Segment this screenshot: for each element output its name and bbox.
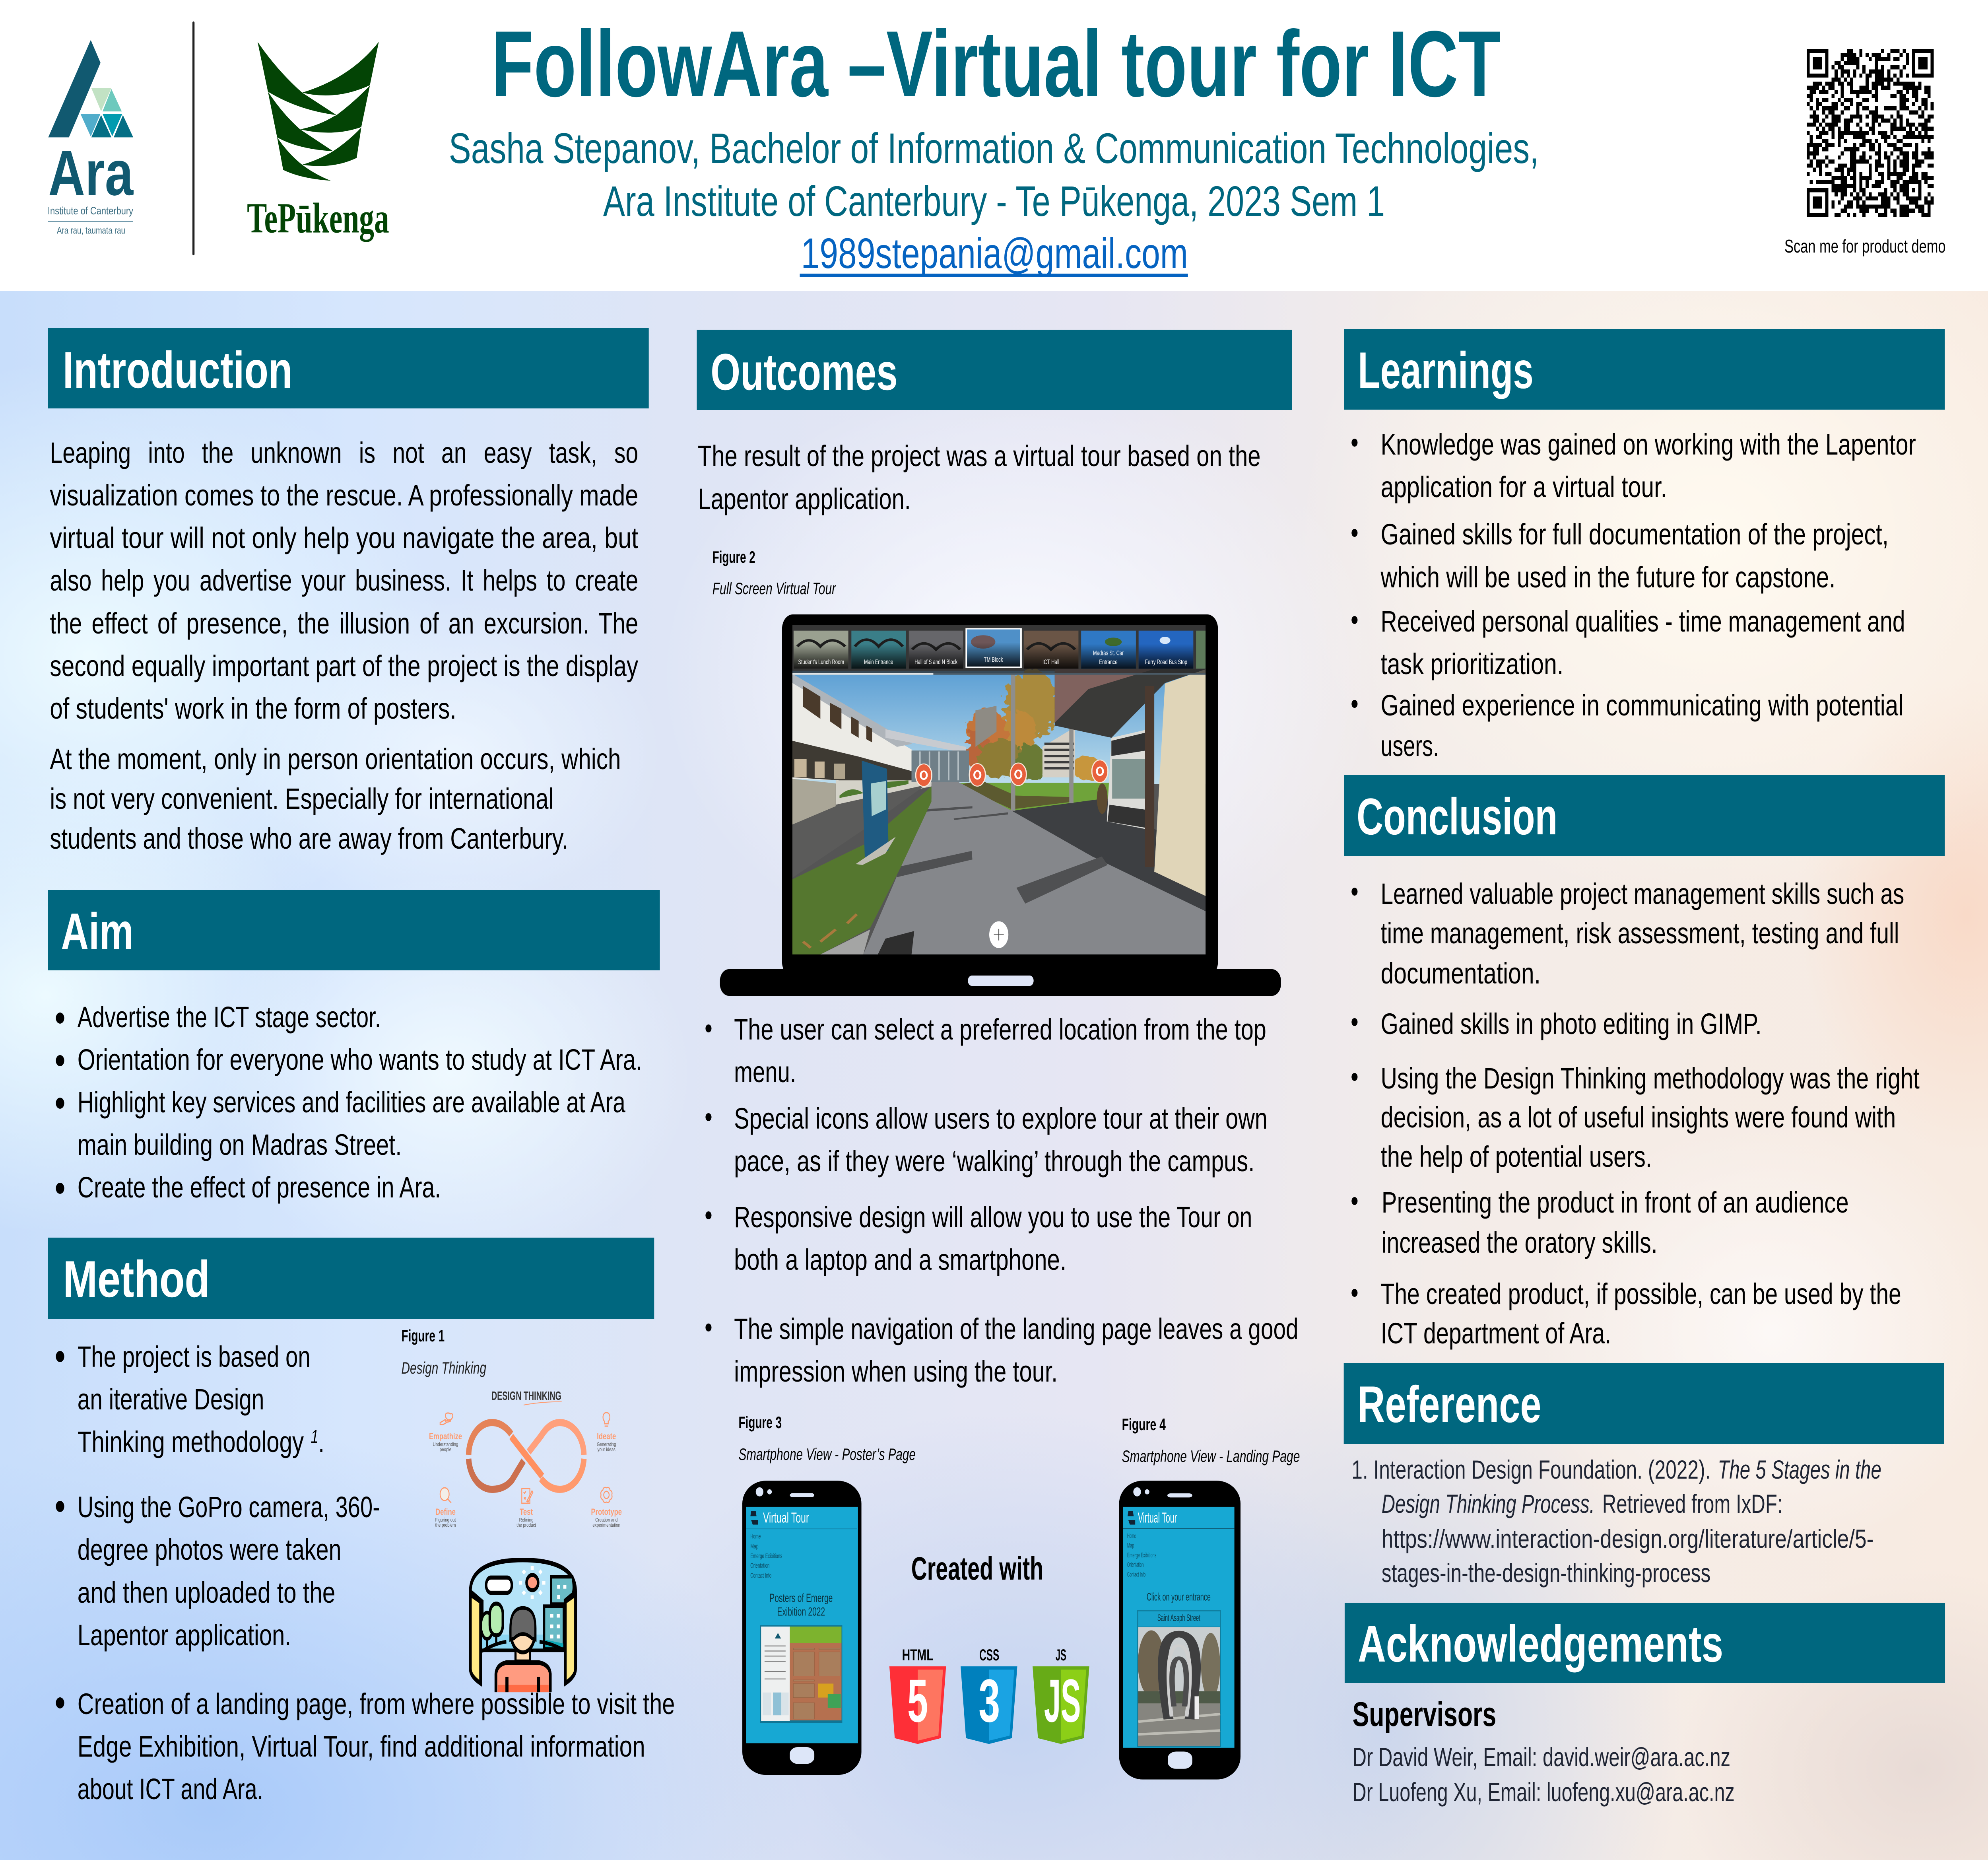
figure 4 caption: Figure 4	[1122, 1415, 1166, 1434]
figure 4 caption	[1122, 1415, 1300, 1465]
stage: prototype: Prototype	[591, 1507, 622, 1517]
smartphone: landing page: Click on your entrance	[1147, 1590, 1211, 1603]
stage: test	[516, 1489, 536, 1528]
QR code	[1807, 49, 1934, 217]
list: outcomes bullets	[705, 1013, 1299, 1388]
poster preview	[760, 1625, 842, 1723]
text block: citation: stages-in-the-design-thinking-process	[1382, 1559, 1710, 1588]
smartphone: posters page: Exibition 2022	[777, 1605, 825, 1618]
list: outcomes bullets: pace, as if they were ‘walking’ through the campus.	[734, 1145, 1254, 1178]
list: aim bullets	[56, 1001, 642, 1204]
figure 1: design thinking: Figure 1	[402, 1326, 445, 1345]
panel: learnings	[1344, 329, 1945, 762]
supervisors contacts: Dr Luofeng Xu, Email: luofeng.xu@ara.ac.nz	[1353, 1778, 1735, 1807]
text block: introduction body: is not very convenient. Especially for international	[50, 782, 553, 815]
figure 1: design thinking	[402, 1326, 622, 1528]
smartphone: posters page	[742, 1481, 862, 1775]
location thumbnails: Main Entrance	[864, 659, 893, 666]
smartphone: landing page: Contact Info	[1127, 1571, 1145, 1578]
heading: Reference: Reference	[1357, 1376, 1541, 1433]
logo divider	[192, 21, 194, 255]
list: outcomes bullets: The user can select a preferred location from the top	[734, 1013, 1266, 1046]
panel: conclusion	[1344, 775, 1945, 1350]
nav markers	[916, 760, 1108, 787]
text block: introduction body: visualization comes to the rescue. A professionally made	[50, 479, 638, 512]
list: method bullets: about ICT and Ara.	[78, 1773, 263, 1806]
list: learnings bullets: Gained skills for full documentation of the project,	[1381, 518, 1889, 551]
smartphone: posters page: Map	[750, 1543, 758, 1550]
figure 2 caption	[712, 548, 836, 598]
figure 1: design thinking: DESIGN THINKING	[491, 1389, 561, 1403]
heading: Aim: Aim	[61, 903, 134, 960]
smartphone: landing page	[1119, 1481, 1241, 1780]
list: conclusion bullets: Learned valuable project management skills such as	[1381, 877, 1904, 910]
heading: Learnings: Learnings	[1358, 342, 1534, 399]
text block: outcomes intro	[698, 439, 1260, 515]
logo: Ara Institute of Canterbury: Ara rau, taumata rau	[57, 225, 125, 236]
smartphone: posters page: Posters of Emerge	[769, 1592, 833, 1604]
list: method bullets: 1	[311, 1426, 318, 1447]
location thumbnails: ICT Hall	[1043, 659, 1059, 666]
list: method bullets: Lapentor application.	[78, 1619, 291, 1652]
text block: citation: https://www.interaction-design.org/literature/article/5-	[1382, 1524, 1873, 1554]
badge: HTML 5: 5	[907, 1667, 928, 1735]
stage: prototype: Creation and	[595, 1518, 617, 1523]
information sign	[862, 760, 889, 858]
badge: HTML 5	[889, 1646, 946, 1744]
list: outcomes bullets: impression when using the tour.	[734, 1355, 1058, 1388]
badge: JS: JS	[1056, 1646, 1066, 1664]
location thumbnails: Ferry Road Bus Stop	[1145, 659, 1187, 666]
text block: citation: The 5 Stages in the	[1718, 1455, 1881, 1485]
supervisors heading: Supervisors	[1353, 1695, 1496, 1734]
list: conclusion bullets: Presenting the product in front of an audience	[1382, 1186, 1849, 1219]
list: method bullets: Creation of a landing page, from where possible to visit the	[78, 1687, 675, 1720]
poles	[1011, 674, 1015, 811]
panel: header	[0, 0, 1988, 291]
list: method bullets: and then uploaded to the	[78, 1576, 335, 1609]
location thumbnails: Madras St. Car	[1093, 650, 1124, 657]
stage: ideate	[597, 1413, 616, 1452]
infinity loop diagram	[469, 1423, 584, 1489]
list: method bullets: Using the GoPro camera, 360-	[78, 1491, 380, 1524]
list: conclusion bullets: Using the Design Thinking methodology was the right	[1381, 1062, 1920, 1095]
list: method bullets: .	[318, 1425, 324, 1458]
stage: define: the problem	[435, 1523, 456, 1528]
panel: header: TePūkenga	[247, 194, 389, 242]
list: outcomes bullets: Special icons allow users to explore tour at their own	[734, 1102, 1268, 1135]
panel: reference	[1344, 1363, 1944, 1588]
smartphone: posters page: Home	[750, 1533, 761, 1540]
right building	[1055, 669, 1206, 738]
list: method bullets: Edge Exhibition, Virtual Tour, find additional information	[78, 1730, 645, 1763]
text block: citation	[1351, 1455, 1881, 1588]
heading: Aim	[48, 890, 660, 970]
text block: outcomes intro: Lapentor application.	[698, 482, 911, 515]
smartphone: landing page: Virtual Tour	[1138, 1510, 1177, 1526]
lawn	[954, 783, 1111, 811]
figure 2 caption: Full Screen Virtual Tour	[712, 579, 836, 598]
figure 3 caption: Figure 3	[738, 1413, 782, 1432]
list: conclusion bullets: The created product, if possible, can be used by the	[1381, 1277, 1901, 1310]
smartphone: landing page: Home	[1127, 1532, 1136, 1539]
list: aim bullets: Highlight key services and facilities are available at Ara	[78, 1086, 625, 1119]
laptop mockup	[720, 614, 1281, 996]
phones and technology badges	[742, 1481, 1241, 1780]
mid building	[1043, 727, 1075, 777]
list: aim bullets: Create the effect of presence in Ara.	[78, 1171, 441, 1204]
figure 1: design thinking: Design Thinking	[402, 1359, 486, 1377]
smartphone: posters page: Emerge Exibitions	[750, 1553, 782, 1560]
list: aim bullets: Advertise the ICT stage sector.	[78, 1001, 381, 1034]
smartphone: posters page: Orientation	[750, 1562, 769, 1569]
email link: 1989stepania@gmail.com	[801, 229, 1188, 278]
smartphone: posters page: Contact Info	[750, 1572, 771, 1579]
list: learnings bullets: Gained experience in communicating with potential	[1381, 689, 1903, 722]
stage: define: Define	[435, 1507, 456, 1517]
left road and grass	[792, 785, 926, 878]
figure 3 caption	[738, 1413, 916, 1464]
author line 1: Sasha Stepanov, Bachelor of Information & Communication Technologies,	[449, 124, 1539, 173]
list: conclusion bullets	[1351, 877, 1920, 1350]
smartphone: posters page: Virtual Tour	[763, 1510, 809, 1526]
list: learnings bullets: application for a virtual tour.	[1381, 470, 1667, 503]
list: method bullets: The project is based on	[78, 1340, 311, 1373]
logo: Ara Institute of Canterbury	[48, 40, 134, 236]
location thumbnails: Student's Lunch Room	[798, 659, 844, 666]
text block: introduction body: virtual tour will not only help you navigate the area, but	[50, 521, 638, 554]
stage: test: the product	[516, 1523, 536, 1528]
phones and technology badges: JS	[1044, 1667, 1081, 1735]
list: conclusion bullets: decision, as a lot of useful insights were found with	[1381, 1101, 1896, 1134]
figure 4 caption: Smartphone View - Landing Page	[1122, 1447, 1300, 1465]
list: outcomes bullets: The simple navigation of the landing page leaves a good	[734, 1312, 1299, 1345]
QR caption: Scan me for product demo	[1784, 236, 1946, 257]
stage: empathize	[429, 1413, 462, 1452]
list: conclusion bullets: the help of potential users.	[1381, 1140, 1652, 1173]
smartphone: landing page: Emerge Exibitions	[1127, 1552, 1156, 1559]
text block: introduction body	[50, 436, 638, 855]
heading: Conclusion	[1344, 775, 1945, 856]
top menu band	[792, 625, 1206, 674]
panel: outcomes	[697, 330, 1300, 1780]
entrance card: Saint Asaph Street: Saint Asaph Street	[1157, 1612, 1200, 1623]
text block: introduction body: At the moment, only in person orientation occurs, which	[50, 742, 621, 775]
list: conclusion bullets: documentation.	[1381, 957, 1541, 990]
stage: test: Test	[520, 1507, 533, 1517]
panel: introduction	[48, 328, 649, 855]
stage: empathize: Understanding	[433, 1442, 458, 1447]
list: learnings bullets: Knowledge was gained on working with the Lapentor	[1381, 428, 1916, 461]
heading: Outcomes	[697, 330, 1292, 410]
stage: prototype: experimentation	[592, 1523, 620, 1528]
left pavement and hedge	[836, 779, 932, 806]
list: learnings bullets: Received personal qualities - time management and	[1381, 605, 1905, 638]
list: conclusion bullets: time management, risk assessment, testing and full	[1381, 917, 1899, 950]
stage: define	[435, 1488, 456, 1528]
heading: Acknowledgements: Acknowledgements	[1358, 1615, 1723, 1673]
stage: ideate: your ideas	[598, 1447, 615, 1452]
heading: Method	[48, 1238, 654, 1319]
badge: CSS 3: CSS	[979, 1646, 999, 1664]
list: conclusion bullets: ICT department of Ara.	[1381, 1317, 1611, 1350]
supervisors contacts: Dr David Weir, Email: david.weir@ara.ac.nz	[1353, 1743, 1730, 1772]
author line 2: Ara Institute of Canterbury - Te Pūkenga, 2023 Sem 1	[603, 177, 1385, 225]
list: outcomes bullets: Responsive design will allow you to use the Tour on	[734, 1201, 1252, 1234]
heading: Outcomes: Outcomes	[711, 344, 898, 401]
entrance card: Saint Asaph Street	[1137, 1610, 1221, 1747]
concrete path	[863, 782, 1206, 954]
smartphone: landing page: Orientation	[1127, 1561, 1143, 1568]
title: FollowAra –Virtual tour for ICT	[491, 12, 1501, 117]
badge: CSS 3: 3	[978, 1667, 1000, 1735]
location thumbnails: Hall of S and N Block	[914, 659, 957, 666]
asphalt	[1012, 799, 1206, 912]
heading: Reference	[1344, 1363, 1944, 1444]
location thumbnails: TM Block	[984, 656, 1003, 663]
stage: ideate: Generating	[597, 1442, 616, 1447]
heading: Learnings	[1344, 329, 1945, 410]
text block: citation: Design Thinking Process.	[1382, 1489, 1595, 1519]
heading: Conclusion: Conclusion	[1357, 788, 1557, 845]
text block: introduction body: also help you advertise your business. It helps to create	[50, 564, 638, 597]
smartphone: landing page: Map	[1127, 1542, 1134, 1549]
badge: JS	[1033, 1646, 1089, 1744]
virtual tour screenshot	[792, 625, 1206, 954]
heading: Method: Method	[63, 1251, 210, 1308]
heading: Acknowledgements	[1345, 1603, 1945, 1683]
text block: introduction body: students and those who are away from Canterbury.	[50, 822, 568, 855]
panel: aim	[48, 890, 660, 1204]
phones and technology badges: Created with	[911, 1551, 1043, 1587]
panel: acknowledgements	[1345, 1603, 1945, 1807]
heading: Introduction: Introduction	[63, 342, 292, 399]
list: learnings bullets: which will be used in the future for capstone.	[1380, 561, 1835, 594]
text block: introduction body: the effect of presence, the illusion of an excursion. The	[50, 607, 638, 640]
list: method bullets	[56, 1340, 675, 1806]
location thumbnails	[794, 629, 1206, 669]
badge: HTML 5: HTML	[902, 1646, 934, 1664]
list: outcomes bullets: both a laptop and a smartphone.	[734, 1243, 1066, 1276]
text block: outcomes intro: The result of the project was a virtual tour based on the	[698, 439, 1260, 472]
list: learnings bullets: task prioritization.	[1381, 647, 1563, 680]
text block: citation: 1. Interaction Design Foundation. (2022).	[1351, 1455, 1710, 1485]
list: conclusion bullets: Gained skills in photo editing in GIMP.	[1381, 1007, 1762, 1040]
list: aim bullets: main building on Madras Street.	[78, 1128, 402, 1161]
badge: CSS 3	[961, 1646, 1017, 1744]
left white building	[792, 678, 912, 780]
list: learnings bullets: users.	[1381, 729, 1439, 762]
figure 3 caption: Smartphone View - Poster’s Page	[738, 1445, 916, 1464]
stage: define: Figuring out	[435, 1518, 456, 1523]
list: method bullets: an iterative Design	[78, 1383, 264, 1416]
stage: empathize: Empathize	[429, 1432, 462, 1442]
stage: test: Refining	[519, 1518, 534, 1523]
stage: empathize: people	[440, 1447, 451, 1452]
list: conclusion bullets: increased the oratory skills.	[1382, 1226, 1658, 1259]
figure 2 caption: Figure 2	[712, 548, 755, 566]
location thumbnails: Entrance	[1099, 659, 1118, 666]
list: outcomes bullets: menu.	[734, 1055, 796, 1088]
trees	[966, 669, 1106, 780]
list: method bullets: Thinking methodology	[78, 1425, 304, 1458]
supervisors contacts	[1353, 1743, 1735, 1807]
logo: Ara Institute of Canterbury: Institute of Canterbury	[48, 205, 134, 217]
text block: introduction body: Leaping into the unknown is not an easy task, so	[50, 436, 638, 469]
list: method bullets: degree photos were taken	[78, 1533, 342, 1566]
logo: Te Pūkenga	[247, 42, 389, 242]
gabion wall	[792, 779, 836, 824]
zoom button	[989, 921, 1008, 948]
text block: introduction body: of students' work in the form of posters.	[50, 692, 456, 725]
stage: prototype	[591, 1487, 622, 1528]
logo: Ara Institute of Canterbury: Ara	[48, 138, 134, 209]
text block: citation: Retrieved from IxDF:	[1602, 1489, 1783, 1519]
list: aim bullets: Orientation for everyone who wants to study at ICT Ara.	[78, 1043, 642, 1076]
text block: introduction body: second equally important part of the project is the display	[50, 649, 638, 682]
glass building	[885, 729, 966, 753]
stage: ideate: Ideate	[597, 1432, 616, 1442]
panel: method	[48, 1238, 675, 1806]
list: learnings bullets	[1351, 428, 1916, 762]
icon: 360-degree viewer	[470, 1560, 576, 1695]
heading: Introduction	[48, 328, 649, 408]
